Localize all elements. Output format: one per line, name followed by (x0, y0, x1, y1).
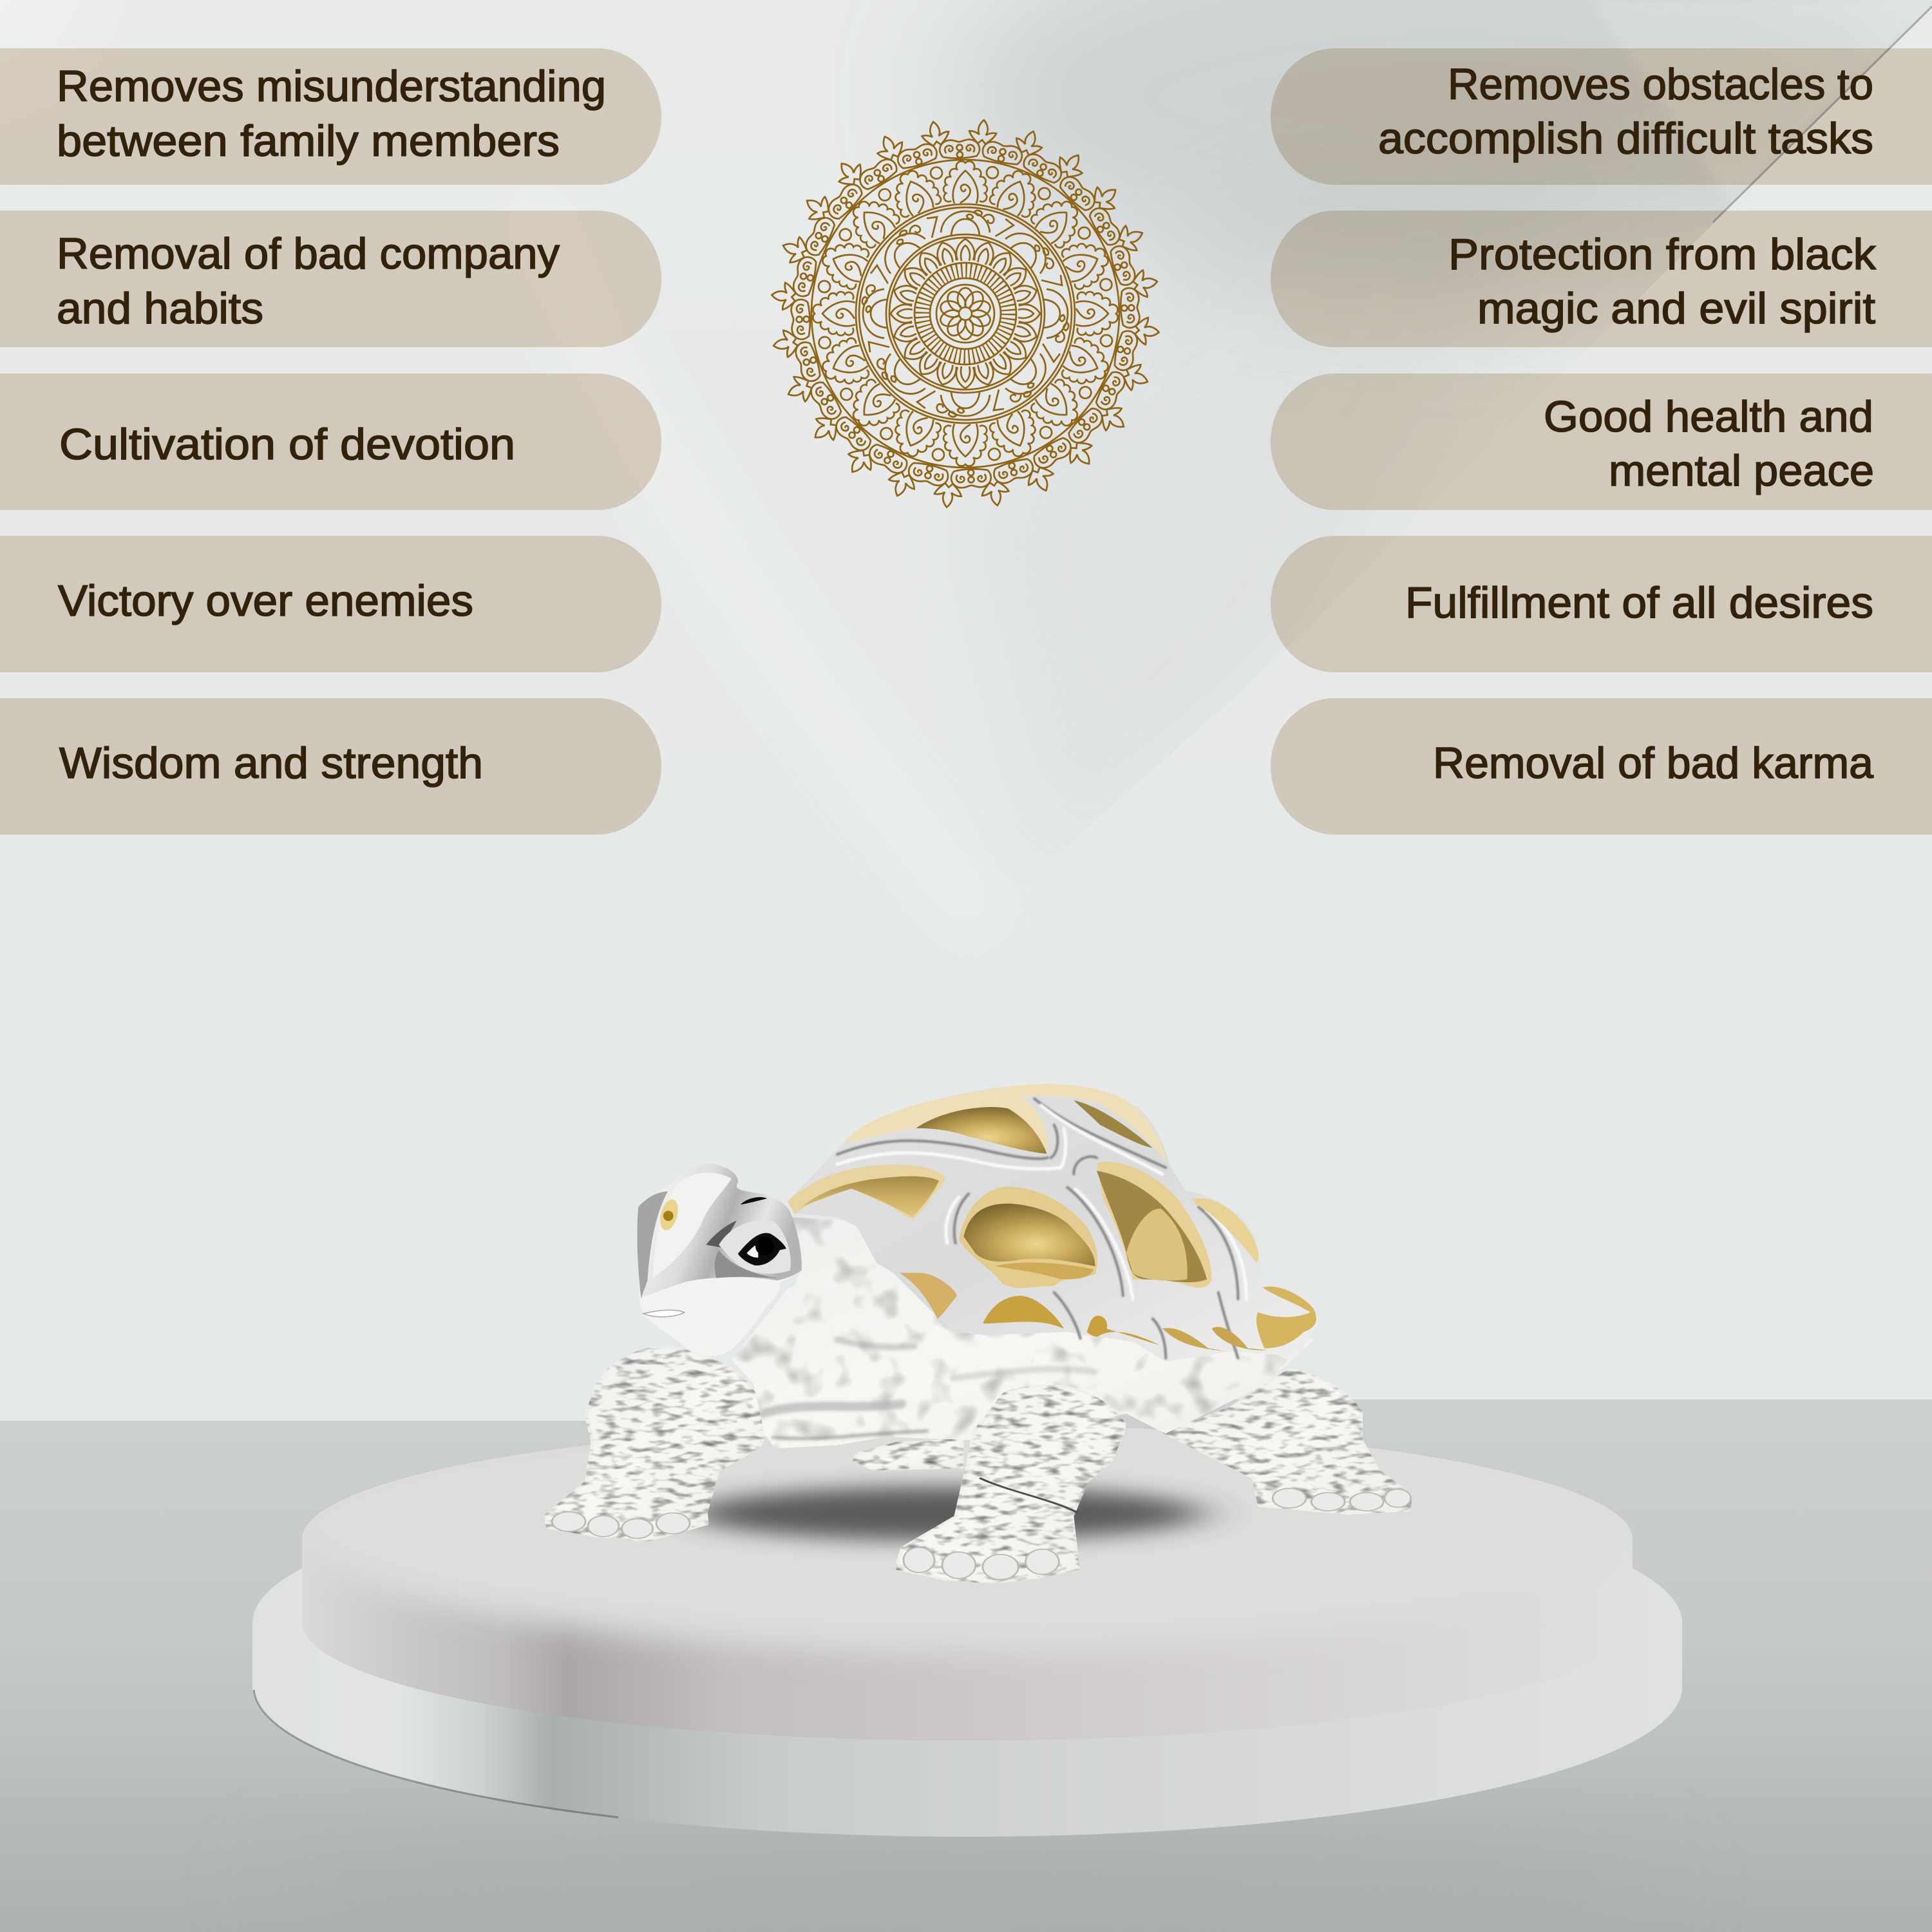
right pill: protection: magic and evil spirit (1477, 284, 1875, 333)
turtle: lower gold fragments (900, 1273, 957, 1319)
mandala ornament (740, 88, 1191, 539)
floor (0, 1399, 1932, 1932)
turtle: gold dot (657, 1197, 681, 1232)
turtle: front leg (552, 1385, 1411, 1583)
mandala: central flower (938, 288, 992, 339)
turtle: eye (719, 1220, 791, 1274)
right pill: karma: Removal of bad karma (1433, 739, 1873, 788)
mandala: paisley leaf ring (812, 160, 1119, 467)
right pill: protection: Protection from black (1448, 230, 1877, 279)
turtle: scute centre (959, 1187, 1097, 1288)
right pill: desires: Fulfillment of all desires (1405, 578, 1873, 627)
mandala: arch ring (862, 211, 1068, 417)
mandala: outer lobes and tips (740, 88, 1191, 539)
left pill: misunderstanding (0, 48, 661, 185)
turtle shadow (689, 1486, 1204, 1540)
right pill: health: Good health and (1544, 392, 1873, 441)
turtle: head (637, 1164, 802, 1356)
turtle: back legs (545, 1347, 1412, 1541)
turtle: body (732, 1217, 1314, 1448)
turtle: toes (552, 1488, 1411, 1580)
turtle: scute top (916, 1107, 1047, 1154)
right pill: protection (1271, 211, 1932, 347)
mandala: rays (922, 270, 1009, 357)
turtle: cream rim (844, 1084, 1168, 1162)
left pill: bad company (0, 211, 661, 347)
left pill: misunderstanding: Removes misunderstanding (57, 62, 606, 111)
right pill: health (1271, 374, 1932, 510)
turtle figurine (545, 1084, 1412, 1583)
right pill: obstacles: accomplish difficult tasks (1378, 114, 1873, 163)
left pill: bad company: and habits (57, 284, 263, 333)
left pill: victory: Victory over enemies (58, 576, 473, 625)
right pill: karma (1271, 698, 1932, 835)
turtle: shell (788, 1084, 1318, 1361)
right pill: health: mental peace (1609, 446, 1874, 495)
turtle: outer and rear scutes (1192, 1198, 1258, 1263)
platform: lower disc (252, 1473, 1682, 1837)
left pill: victory (0, 536, 661, 672)
left pill: wisdom (0, 698, 661, 835)
left pill: devotion: Cultivation of devotion (59, 420, 515, 469)
right pill: obstacles (1271, 48, 1932, 185)
background wall (936, 0, 1932, 761)
turtle: mouth (643, 1310, 685, 1317)
turtle: scute left (788, 1164, 945, 1219)
turtle: scute right (1097, 1162, 1212, 1288)
platform: upper disc (294, 1399, 1640, 1741)
left pill: misunderstanding: between family members (57, 117, 560, 166)
right pill: desires (1271, 536, 1932, 672)
left pill: bad company: Removal of bad company (57, 229, 560, 278)
left pill: devotion (0, 374, 661, 510)
right pill: obstacles: Removes obstacles to (1448, 60, 1873, 109)
turtle: ridges (837, 1099, 1238, 1358)
left pill: wisdom: Wisdom and strength (59, 739, 483, 788)
turtle: body streaks (764, 1340, 1095, 1439)
mandala: petal ring (891, 239, 1040, 388)
